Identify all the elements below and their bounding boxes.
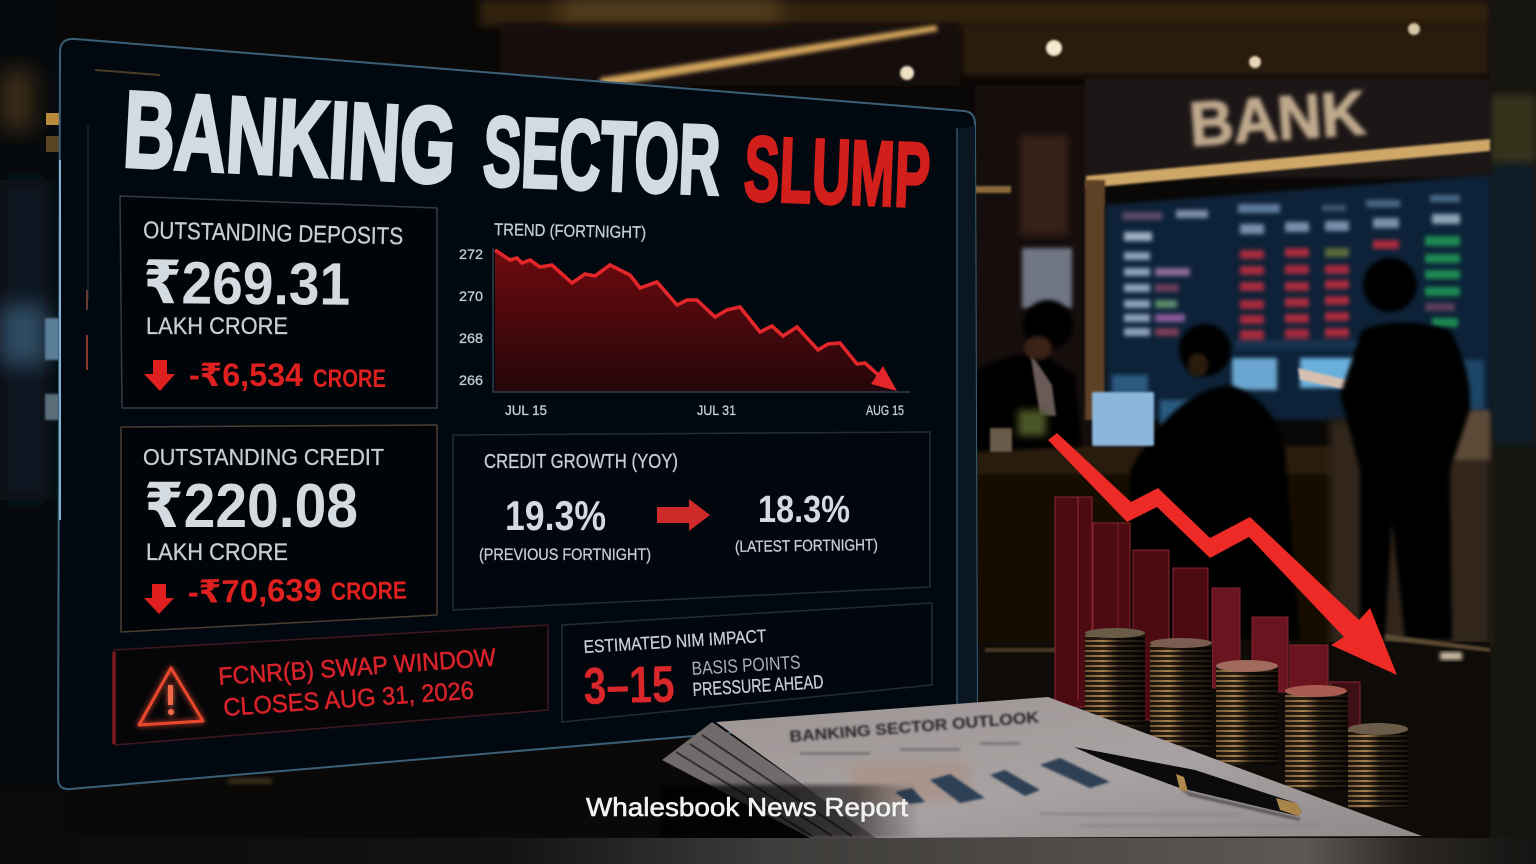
report papers and pen [662, 697, 1422, 838]
panel: outstanding credit: CRORE [331, 577, 407, 606]
bank wall [975, 85, 1090, 445]
callout: FCNR(B) swap window: FCNR(B) SWAP WINDOW [217, 644, 497, 691]
icon: down arrow [144, 584, 174, 614]
bar chart: translucent red bars [1055, 497, 1360, 742]
icon: down arrow [144, 360, 175, 391]
chart: deposit trend: JUL 31 [697, 403, 736, 418]
market display screen [1106, 175, 1490, 426]
icon: warning triangle [139, 668, 203, 725]
panel: estimated NIM impact [562, 603, 932, 722]
bottom blurred strip [0, 838, 1536, 864]
panel: credit growth: CREDIT GROWTH (YOY) [484, 451, 678, 473]
panel: outstanding credit: OUTSTANDING CREDIT [143, 444, 384, 470]
heading: Banking Sector Slump: BANKING [121, 68, 459, 206]
panel: outstanding credit: ₹220.08 [144, 472, 358, 541]
arrow: large red decline arrow [1048, 433, 1397, 675]
mini bar chart on paper [895, 758, 1110, 804]
panel: outstanding deposits: ₹269.31 [143, 249, 350, 318]
chart: deposit trend [459, 220, 910, 418]
heading: Banking Sector Slump: SLUMP [742, 118, 932, 227]
chart: deposit trend: JUL 15 [505, 403, 547, 418]
ceiling [480, 0, 1490, 88]
panel: credit growth: (LATEST FORTNIGHT) [735, 537, 878, 556]
chart: deposit trend: 272 [459, 247, 483, 262]
chart: deposit trend: 266 [459, 373, 483, 388]
gold light strip [1086, 139, 1490, 188]
BANK sign: BANK [1187, 79, 1368, 160]
table [975, 642, 1490, 864]
report papers and pen: BANKING SECTOR OUTLOOK [789, 709, 1040, 746]
panel: credit growth: 19.3% [505, 492, 606, 539]
panel: outstanding deposits: CRORE [313, 365, 386, 393]
chart: deposit trend: 268 [459, 331, 483, 346]
panel: credit growth: 18.3% [758, 489, 850, 531]
side strips [1490, 0, 1536, 864]
panel: outstanding credit [121, 425, 437, 632]
panel: outstanding deposits: OUTSTANDING DEPOSITS [143, 217, 403, 250]
chart: deposit trend: TREND (FORTNIGHT) [494, 220, 646, 242]
chart: deposit trend: AUG 15 [866, 403, 904, 418]
panel: credit growth: (PREVIOUS FORTNIGHT) [479, 545, 651, 564]
panel: estimated NIM impact: ESTIMATED NIM IMPACT [583, 626, 767, 657]
panel: outstanding credit: LAKH CRORE [146, 539, 288, 566]
desk and floor [975, 446, 1335, 476]
pen [1074, 747, 1302, 821]
heading: Banking Sector Slump [121, 68, 932, 227]
panel: estimated NIM impact: 3–15 [583, 656, 675, 716]
panel: estimated NIM impact: PRESSURE AHEAD [692, 672, 824, 701]
heading: Banking Sector Slump: SECTOR [481, 95, 722, 215]
panel: outstanding deposits: -₹6,534 [189, 357, 303, 393]
people silhouettes [975, 258, 1470, 640]
laptop [1092, 392, 1154, 446]
watermark backing shadow [660, 785, 920, 838]
arrow: previous to latest [657, 499, 710, 531]
callout: FCNR(B) swap window [114, 625, 548, 745]
panel: credit growth [453, 432, 930, 610]
panel: outstanding deposits [120, 196, 437, 408]
coin stacks [1085, 628, 1408, 808]
panel: outstanding deposits: LAKH CRORE [146, 313, 288, 340]
chart: deposit trend: 270 [459, 289, 483, 304]
panel: outstanding credit: -₹70,639 [187, 572, 322, 610]
callout: FCNR(B) swap window: CLOSES AUG 31, 2026 [222, 677, 475, 722]
panel: estimated NIM impact: BASIS POINTS [691, 652, 801, 680]
watermark caption: Whalesbook News Report [586, 792, 909, 822]
panel: glass dashboard [58, 39, 977, 789]
